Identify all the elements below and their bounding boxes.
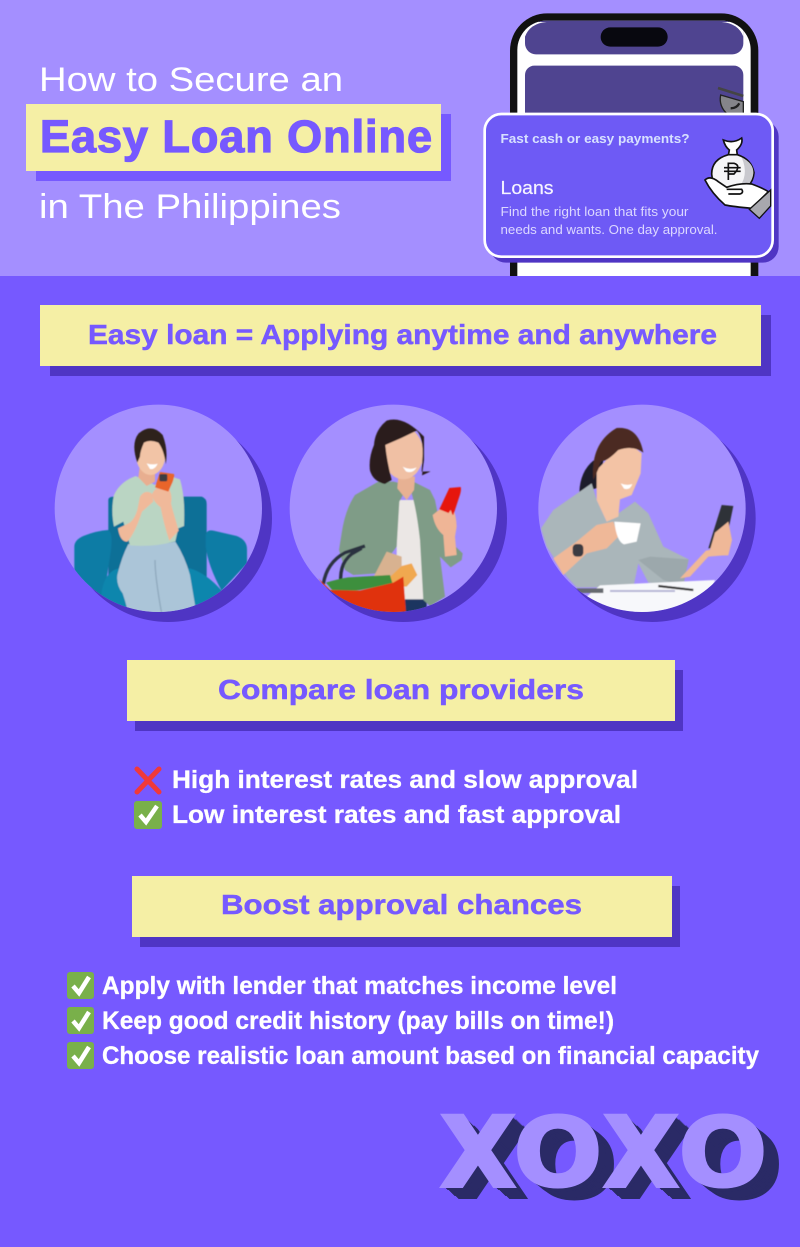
neck and face [397, 477, 415, 500]
phone [708, 505, 733, 548]
title line 1: How to Secure an [39, 61, 343, 99]
t-shirt [397, 500, 425, 602]
low rate item: Low interest rates and fast approval [172, 801, 621, 829]
tip 3: Choose realistic loan amount based on financial capacity [102, 1042, 759, 1070]
extended arm [680, 547, 728, 578]
title highlight shadow [36, 114, 451, 181]
card shadow [490, 121, 779, 263]
card heading: Loans [500, 178, 554, 198]
logo: XOXO: X [604, 1097, 678, 1209]
section heading: boost approval chances [132, 876, 680, 947]
header background [0, 0, 800, 276]
section heading: compare loan providers: Compare loan providers [218, 674, 584, 705]
jeans [117, 542, 195, 620]
phone [439, 487, 461, 515]
arm holding cup [553, 522, 618, 575]
photo circle: woman with coffee at desk [538, 405, 756, 622]
shirt [112, 476, 184, 546]
comparison list [134, 766, 638, 829]
ponytail [579, 460, 603, 493]
smile [147, 463, 158, 469]
hair [134, 428, 167, 464]
cup [614, 522, 641, 544]
smile [403, 467, 417, 472]
high rate item: High interest rates and slow approval [172, 766, 638, 794]
hand [708, 522, 732, 555]
head [136, 440, 166, 475]
section heading: applying anytime: Easy loan = Applying anytime and anywhere [88, 319, 717, 350]
hair [593, 428, 643, 480]
phone mockup with loans card [483, 13, 779, 276]
grey bag icon behind card [718, 88, 743, 115]
phone notch [601, 27, 668, 47]
logo: XOXO: O [513, 1097, 603, 1209]
phone second panel [525, 66, 744, 113]
neck and face [597, 447, 642, 522]
logo: XOXO [439, 1097, 779, 1209]
basket handle [323, 546, 365, 589]
card text [500, 131, 718, 237]
armchair [74, 497, 247, 620]
logo: XOXO: X [441, 1097, 515, 1209]
desk [587, 580, 715, 620]
arms [118, 492, 153, 542]
phone top panel [525, 20, 744, 54]
photo circle: woman with grocery basket [290, 405, 507, 622]
watch [573, 544, 583, 557]
jeans [403, 599, 427, 613]
tip 1: Apply with lender that matches income level [102, 972, 617, 1000]
photo circle: woman on armchair [55, 405, 272, 622]
shirt [541, 483, 689, 587]
money bag in hand icon [705, 138, 771, 218]
section heading: boost approval chances: Boost approval chances [221, 889, 582, 920]
title line 2: Easy Loan Online [40, 111, 432, 162]
card [485, 114, 773, 257]
basket [318, 577, 406, 613]
phone [155, 472, 174, 492]
card description line 1: Find the right loan that fits your [500, 205, 688, 219]
phone body [510, 13, 758, 276]
forearm and hand [433, 502, 457, 557]
section heading: compare loan providers [127, 660, 683, 731]
approval tips list [67, 972, 759, 1070]
title block [26, 61, 451, 226]
tip 2: Keep good credit history (pay bills on time!) [102, 1007, 614, 1035]
icon: red cross [137, 769, 159, 792]
title line 3: in The Philippines [39, 188, 341, 226]
icon: green check [67, 1042, 94, 1069]
card description line 2: needs and wants. One day approval. [500, 223, 718, 237]
card question: Fast cash or easy payments? [500, 131, 690, 146]
icon: green check [67, 1007, 94, 1034]
icon: green check [67, 972, 94, 999]
pen [658, 586, 693, 590]
icon: green check [134, 801, 162, 829]
section heading: applying anytime [40, 305, 771, 376]
title highlight box [26, 104, 441, 171]
neck [138, 465, 155, 486]
bread [373, 552, 402, 578]
hair [370, 419, 431, 484]
logo: XOXO: O [678, 1097, 768, 1209]
jacket [339, 482, 408, 575]
vegetables [326, 575, 393, 593]
smile [621, 483, 632, 489]
